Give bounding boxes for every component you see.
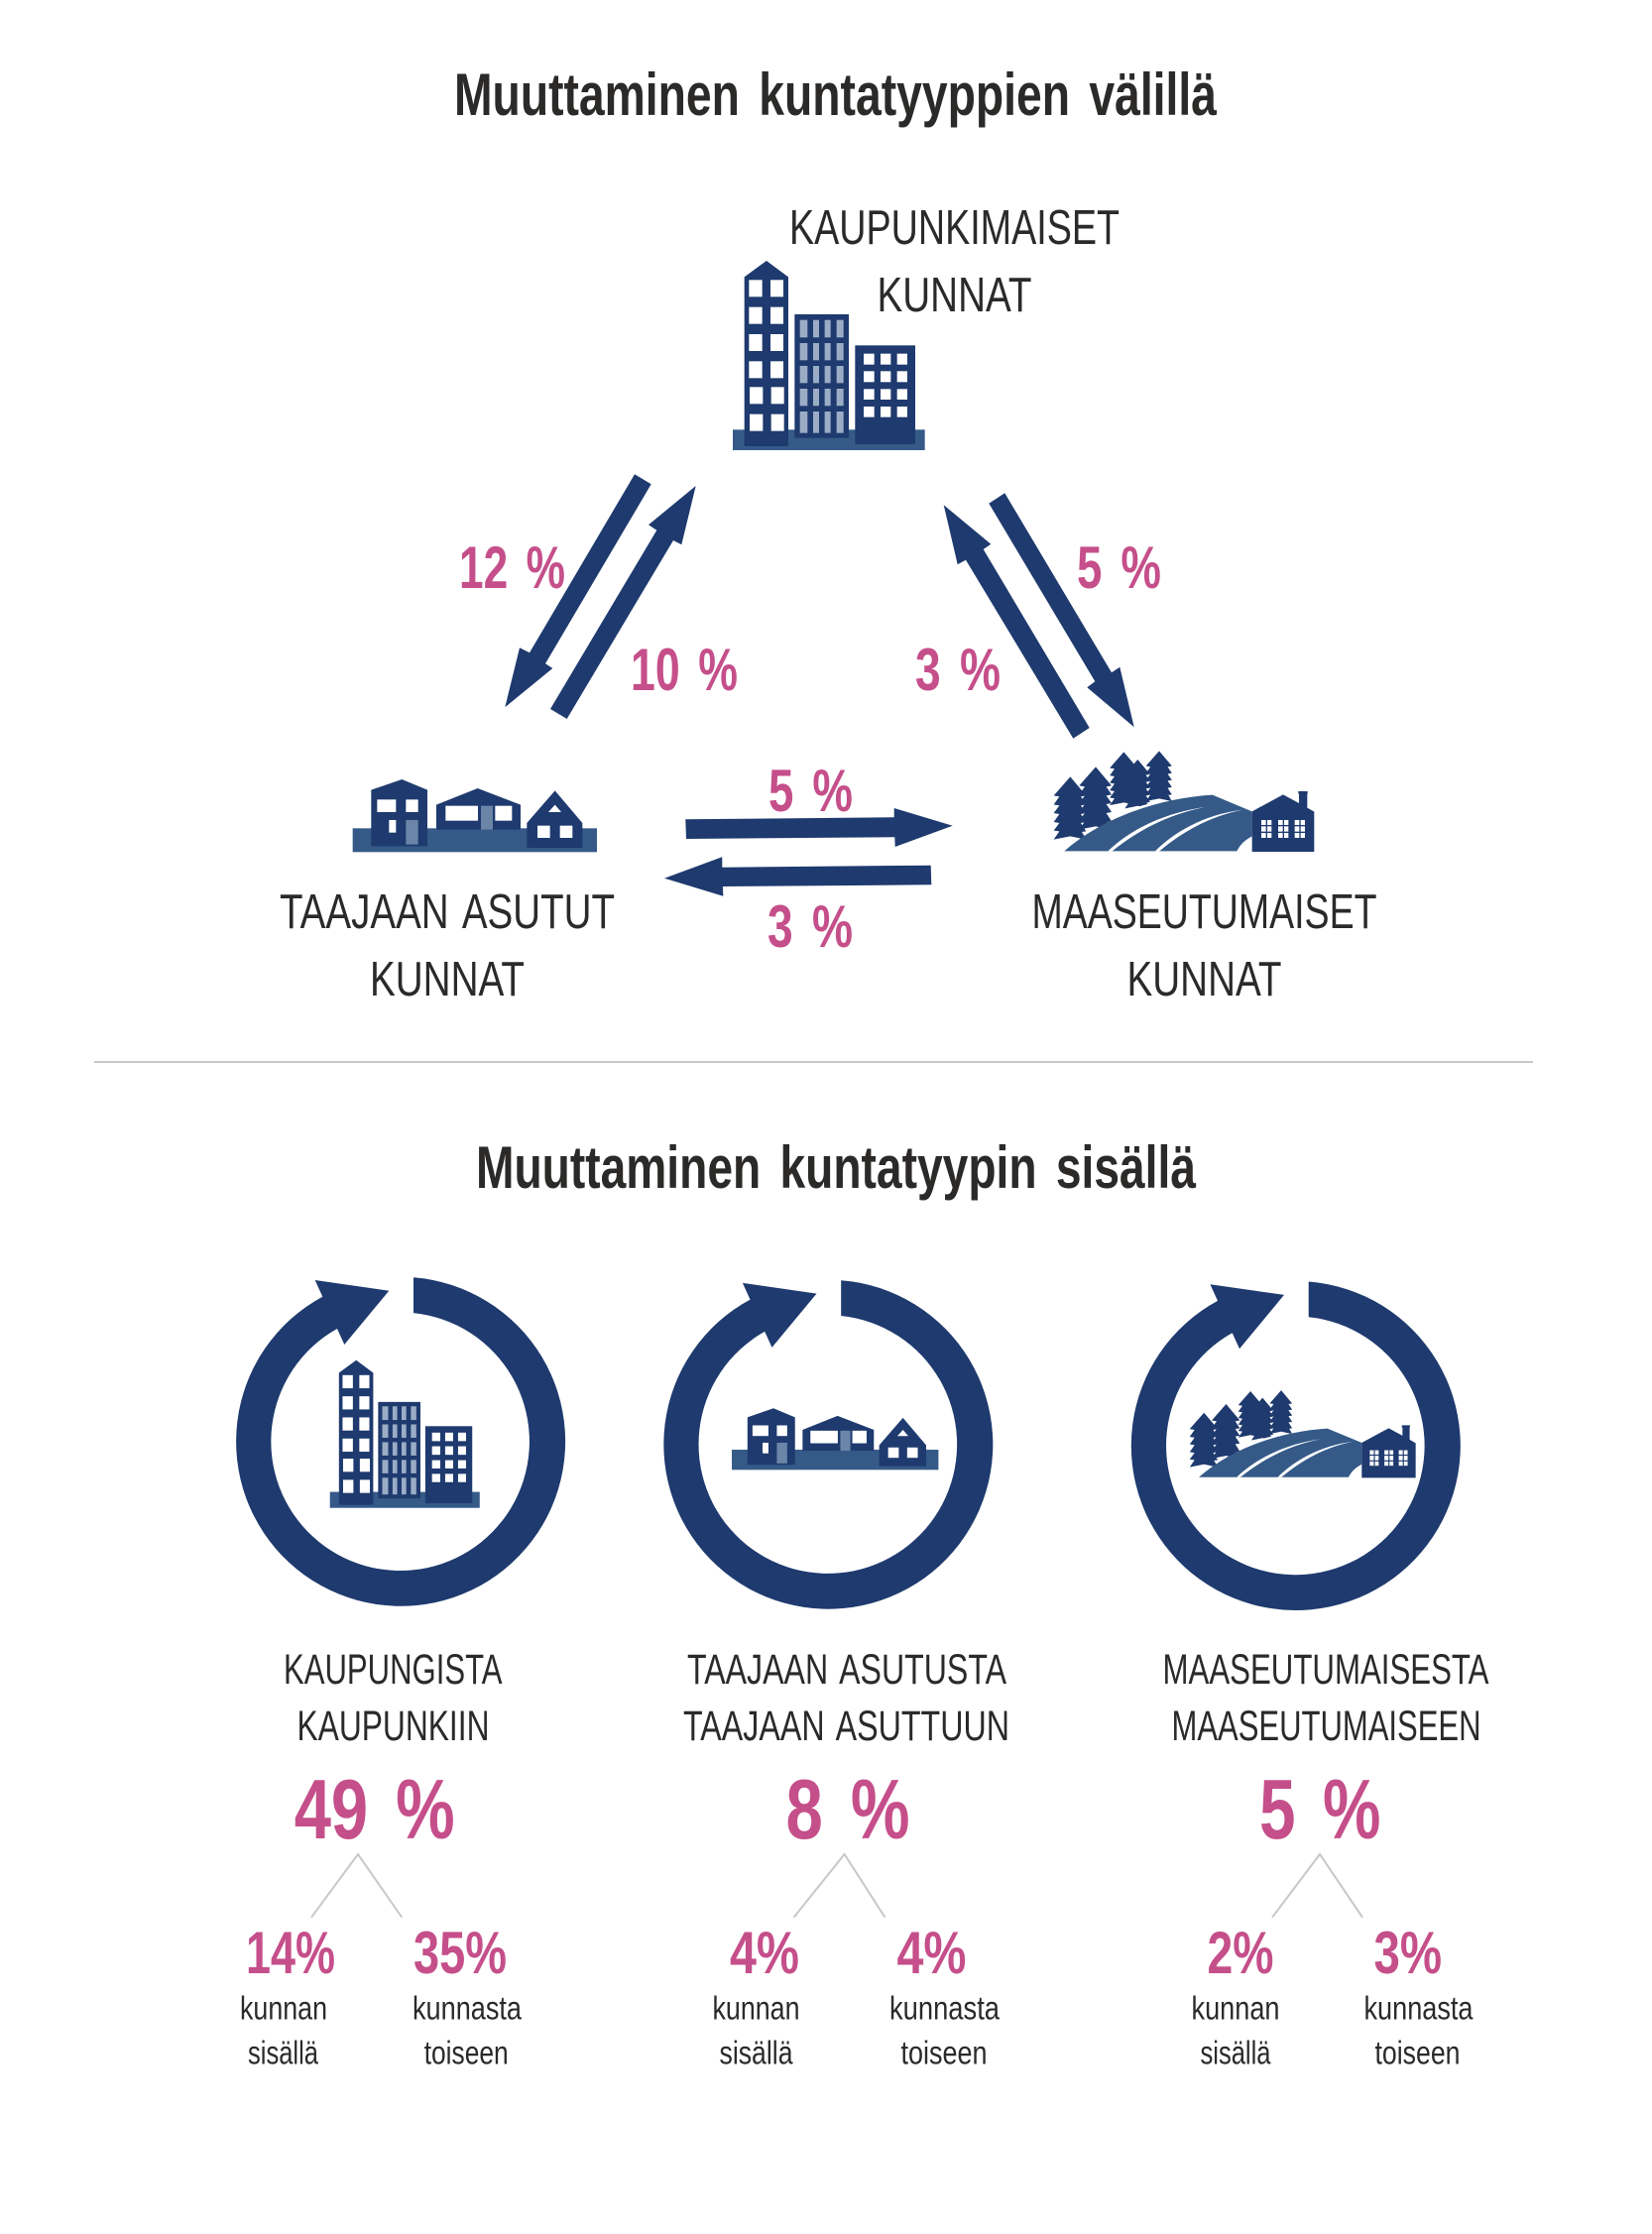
- connector: [1272, 1854, 1362, 1918]
- label: TAAJAAN ASUTUSTA: [687, 1646, 1006, 1694]
- value: 5 % urban to rural: 5 %: [1077, 534, 1161, 601]
- title: between municipality types: Muuttaminen kuntatyyppien välillä: [454, 61, 1217, 128]
- icon: city buildings: [330, 1360, 480, 1508]
- label: MAASEUTUMAISESTA: [1162, 1646, 1489, 1694]
- note: within municipality: [240, 1990, 327, 2071]
- note: within municipality: sisällä: [720, 2035, 793, 2071]
- value: 4 % between: 4%: [896, 1920, 966, 1986]
- value: 5 % semi-urban to rural: 5 %: [768, 758, 853, 824]
- label: urban municipalities: KUNNAT: [877, 269, 1031, 322]
- note: to another municipality: [889, 1990, 1001, 2071]
- circular arrow: [663, 1280, 993, 1609]
- arrow: urban to semi-urban: [505, 474, 651, 707]
- value: 14 %: 14%: [246, 1920, 335, 1986]
- icon: rural landscape: [1054, 751, 1314, 852]
- note: to another municipality: kunnasta: [1364, 1990, 1474, 2027]
- note: within municipality: kunnan: [240, 1990, 327, 2027]
- label: urban municipalities: KAUPUNKIMAISET: [789, 201, 1120, 255]
- note: to another municipality: kunnasta: [889, 1990, 1001, 2027]
- label: rural municipalities: MAASEUTUMAISET: [1031, 885, 1376, 939]
- label: rural municipalities: KUNNAT: [1126, 953, 1281, 1006]
- note: to another municipality: [413, 1990, 523, 2071]
- note: to another municipality: kunnasta: [413, 1990, 523, 2027]
- label: semi-urban municipalities: [280, 885, 615, 1006]
- circular arrow: [1131, 1281, 1461, 1610]
- note: to another municipality: toiseen: [424, 2035, 509, 2071]
- note: within municipality: [712, 1990, 799, 2071]
- icon: rural landscape: [1190, 1390, 1416, 1477]
- connector: [311, 1854, 402, 1918]
- label: KAUPUNKIIN: [297, 1703, 490, 1750]
- label: semi-urban municipalities: TAAJAAN ASUTUT: [280, 885, 615, 939]
- note: within municipality: sisällä: [1200, 2035, 1271, 2071]
- note: within municipality: kunnan: [712, 1990, 799, 2027]
- label: [683, 1646, 1009, 1750]
- icon: town houses: [353, 779, 597, 852]
- label: [1162, 1646, 1489, 1750]
- value: 3 %: 3%: [1374, 1920, 1442, 1986]
- panel: rural to rural: [1131, 1281, 1489, 2071]
- note: within municipality: sisällä: [248, 2035, 318, 2071]
- panel: urban to urban: [236, 1277, 565, 2071]
- arrow: semi-urban to urban: [550, 486, 696, 719]
- arrow: urban to rural: [989, 493, 1134, 727]
- arrow: rural to urban: [944, 505, 1090, 739]
- value: 49 %: 49 %: [295, 1763, 455, 1857]
- note: within municipality: [1192, 1990, 1279, 2071]
- label: TAAJAAN ASUTTUUN: [683, 1703, 1009, 1750]
- value: 4 % within: 4%: [730, 1920, 799, 1986]
- value: 3 % rural to urban: 3 %: [915, 637, 1001, 703]
- value: 5 %: 5 %: [1259, 1763, 1380, 1857]
- label: [284, 1646, 503, 1750]
- value: 35 %: 35%: [413, 1920, 507, 1986]
- value: 12 %: 12 %: [459, 534, 565, 601]
- circular arrow: [236, 1277, 565, 1606]
- note: to another municipality: toiseen: [1374, 2035, 1460, 2071]
- label: rural municipalities: [1031, 885, 1376, 1006]
- label: MAASEUTUMAISEEN: [1172, 1703, 1481, 1750]
- note: to another municipality: toiseen: [900, 2035, 988, 2071]
- arrow: semi-urban to rural: [685, 808, 953, 847]
- label: semi-urban municipalities: KUNNAT: [370, 953, 525, 1006]
- note: to another municipality: [1364, 1990, 1474, 2071]
- icon: town houses: [732, 1408, 938, 1470]
- icon: city buildings: [733, 261, 925, 450]
- label: KAUPUNGISTA: [284, 1646, 503, 1694]
- value: 10 %: 10 %: [631, 637, 738, 703]
- title: within municipality type: Muuttaminen kuntatyypin sisällä: [476, 1134, 1196, 1201]
- value: 3 % rural to semi-urban: 3 %: [767, 893, 853, 960]
- value: 2 %: 2%: [1208, 1920, 1273, 1986]
- note: within municipality: kunnan: [1192, 1990, 1279, 2027]
- label: urban municipalities: [789, 201, 1120, 322]
- panel: semi-urban to semi-urban: [663, 1280, 1009, 2071]
- arrow: rural to semi-urban: [664, 857, 931, 896]
- connector: [793, 1854, 885, 1918]
- value: 8 %: 8 %: [785, 1763, 910, 1857]
